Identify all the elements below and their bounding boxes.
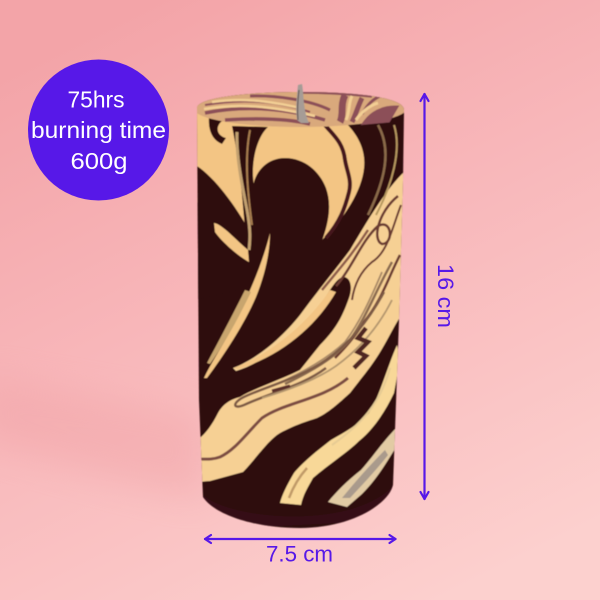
badge: burning time and weight: 75hrs (68, 86, 124, 112)
thin arch cream stripe (204, 233, 270, 378)
dark curl (208, 118, 226, 144)
tan streak lines (237, 125, 350, 250)
top cream area (195, 104, 364, 240)
marbled candle (194, 84, 406, 530)
brown marble lines (198, 125, 401, 498)
top surface mauve stripes (205, 92, 395, 124)
wick shadow (298, 90, 299, 120)
left top dark with tan streaks (232, 126, 268, 240)
height arrow (420, 94, 428, 499)
cream finger (214, 223, 249, 262)
left dark sweep (196, 166, 247, 299)
width arrow (205, 535, 396, 543)
dark blob (252, 157, 330, 241)
candle body (197, 92, 404, 528)
height label: 16 cm (433, 264, 458, 328)
badge: burning time and weight: burning time (31, 117, 166, 143)
width label: 7.5 cm (266, 542, 333, 566)
badge: burning time and weight: 600g (70, 148, 128, 174)
right swirl and large band (197, 172, 406, 482)
top surface (194, 91, 406, 127)
thin upper stripes (207, 290, 251, 364)
cream band lower (280, 345, 400, 505)
wick (296, 84, 309, 123)
badge: burning time and weight (28, 60, 169, 200)
grey cream band (328, 428, 396, 507)
bottom soft sheen (202, 489, 390, 526)
candle shadow (0, 375, 205, 500)
top surface cream stripes (204, 96, 378, 120)
